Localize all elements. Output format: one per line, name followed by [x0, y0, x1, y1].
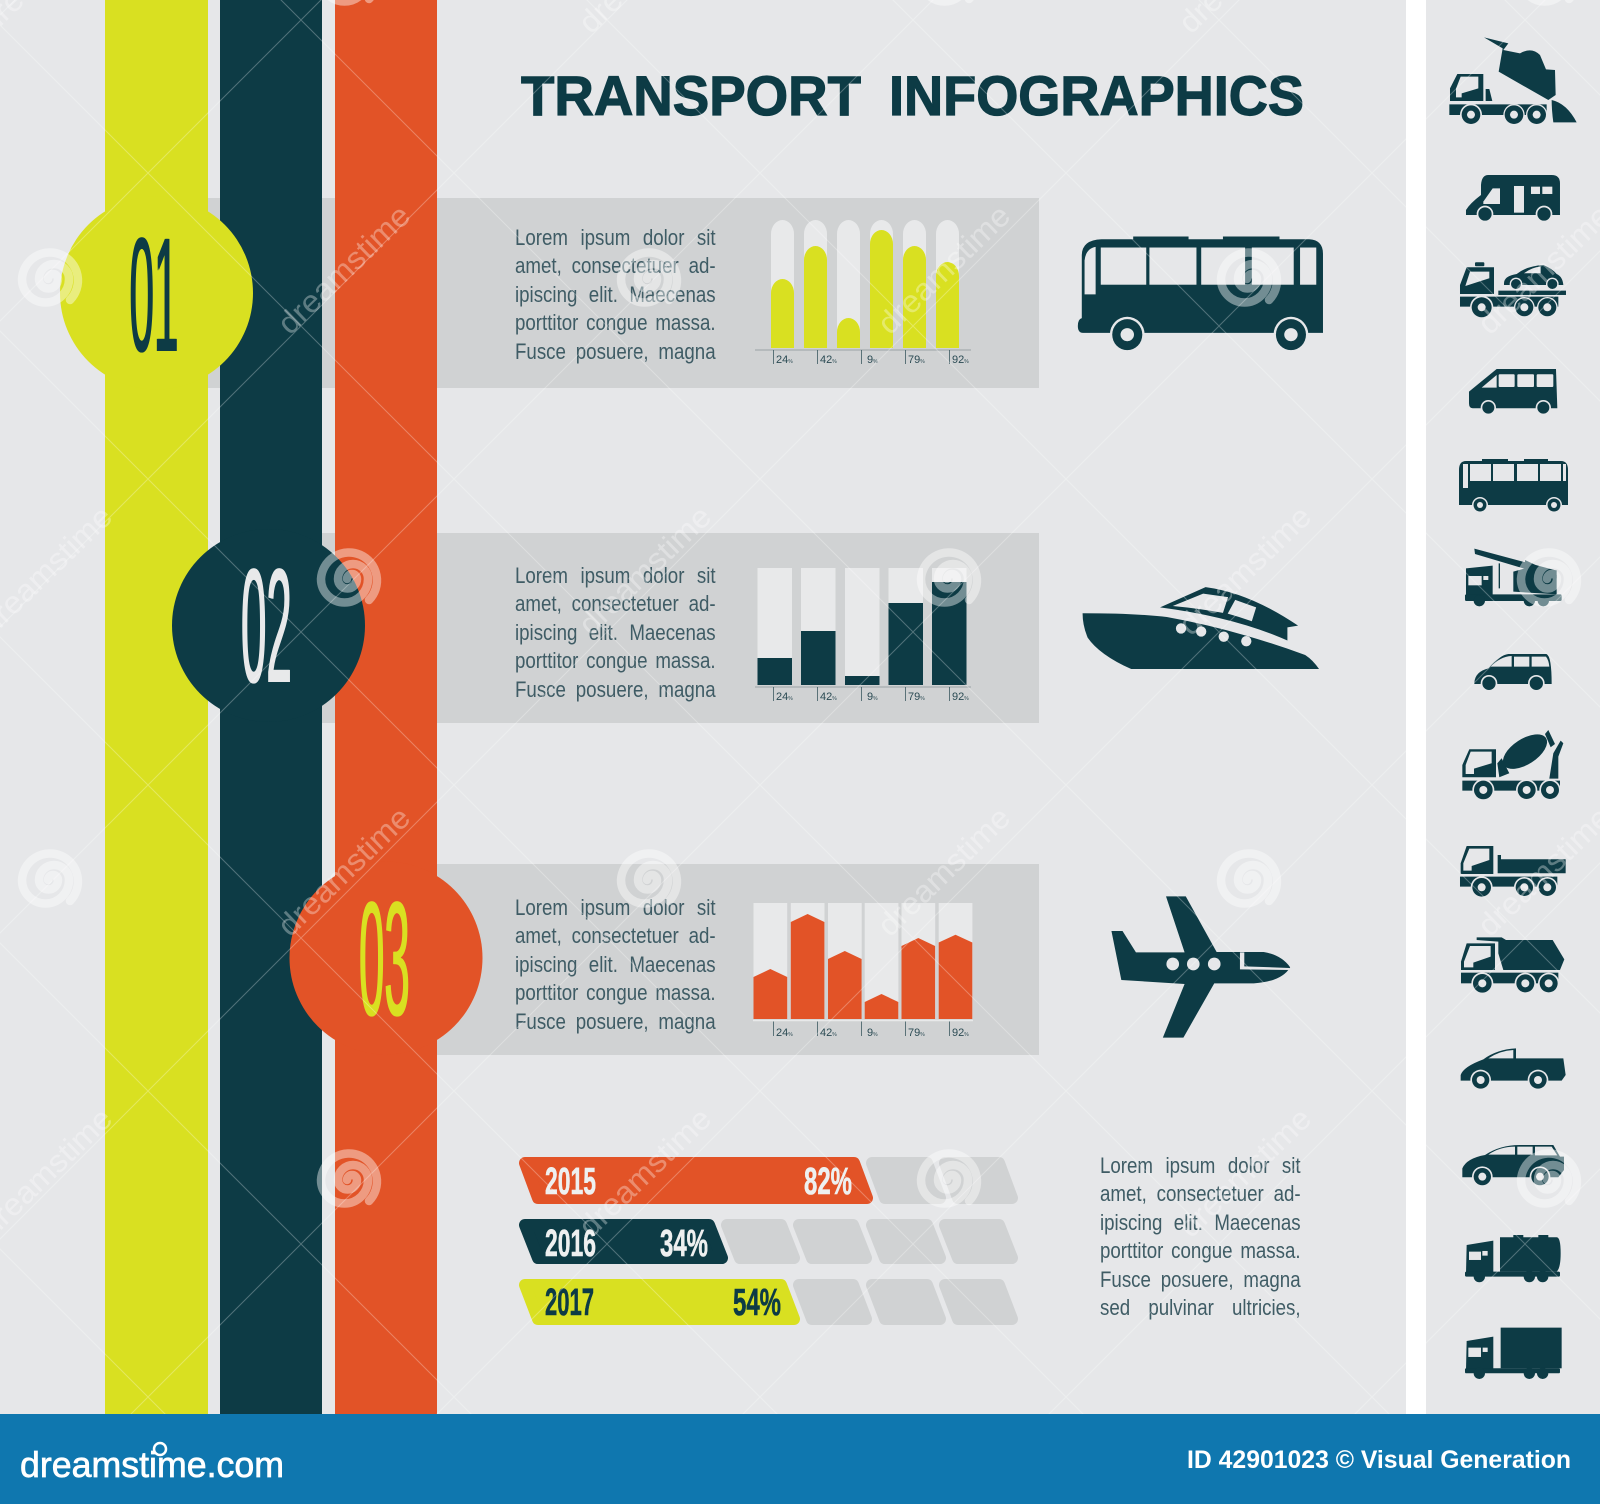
bar: 2015 82%: 82% — [804, 1161, 852, 1203]
text block: row 2: amet, consectetuer ad- — [515, 591, 716, 616]
chart: rounded yellow bars: 9% — [867, 354, 878, 366]
icon: station wagon — [1462, 1145, 1564, 1187]
chart: orange house-top bars: 9% — [867, 1027, 878, 1039]
icon: minivan — [1474, 654, 1552, 692]
watermark overlay: dreamstime — [572, 499, 718, 642]
bar: 2015 82%: 2015 — [545, 1161, 596, 1203]
icon: airplane — [1111, 896, 1290, 1038]
footer band: ID 42901023 © Visual Generation — [1187, 1446, 1571, 1474]
circle badge 03 — [290, 862, 482, 1054]
chart: navy column bars — [755, 568, 971, 703]
watermark overlay: dreamstime — [271, 800, 417, 943]
text block: row 3: amet, consectetuer ad- — [515, 923, 716, 948]
icon: cement mixer — [1462, 727, 1563, 801]
watermark overlay: dreamstime — [271, 198, 417, 341]
chart: orange house-top bars: 92% — [952, 1027, 969, 1039]
chart: orange house-top bars — [753, 903, 973, 1039]
text block: bottom right — [1100, 1153, 1301, 1320]
text block: row 3: Lorem ipsum dolor sit — [515, 895, 716, 920]
chart: navy column bars: 92% — [952, 691, 969, 703]
chart: rounded yellow bars — [755, 220, 971, 366]
text block: row 2: Fusce posuere, magna — [515, 677, 716, 702]
circle badge 02 — [172, 529, 365, 722]
watermark overlay: dreamstime — [572, 1101, 718, 1244]
text block: row 1: Lorem ipsum dolor sit — [515, 225, 716, 250]
icon: large bus — [1078, 236, 1323, 353]
bar: 2016 34%: 34% — [660, 1223, 708, 1265]
icon: pickup — [1461, 1048, 1566, 1090]
chart: rounded yellow bars: 79% — [908, 354, 925, 366]
panel: row 1 background — [208, 198, 1039, 388]
icon: dumper truck — [1461, 937, 1564, 994]
text block: row 3 — [515, 895, 716, 1034]
chart: orange house-top bars: 24% — [776, 1027, 793, 1039]
text block: bottom right: Fusce posuere, magna — [1100, 1267, 1301, 1292]
title — [521, 64, 1304, 127]
panel: row 2 background — [322, 533, 1039, 723]
icon: camper van — [1466, 175, 1560, 222]
bar: 2017 54%: 2017 — [545, 1282, 594, 1324]
bar: 2016 34%: 2016 — [545, 1223, 596, 1265]
bar: 2016 34% — [525, 1223, 1012, 1265]
text block: row 1: Fusce posuere, magna — [515, 339, 716, 364]
footer band — [0, 1414, 1600, 1504]
icon: flatbed truck — [1460, 846, 1566, 898]
text block: bottom right: amet, consectetuer ad- — [1100, 1181, 1301, 1206]
text block: bottom right: Lorem ipsum dolor sit — [1100, 1153, 1301, 1178]
title: INFOGRAPHICS — [889, 64, 1304, 127]
text block: row 2: Lorem ipsum dolor sit — [515, 563, 716, 588]
text block: row 2: ipiscing elit. Maecenas — [515, 620, 716, 645]
watermark overlay: dreamstime — [1172, 499, 1318, 642]
chart: navy column bars: 24% — [776, 691, 793, 703]
icon: tanker truck — [1465, 1235, 1561, 1282]
chart: navy column bars: 42% — [820, 691, 837, 703]
text block: row 1: ipiscing elit. Maecenas — [515, 282, 716, 307]
chart: orange house-top bars: 79% — [908, 1027, 925, 1039]
circle badge 03: 03 — [358, 869, 409, 1050]
icon: dump truck — [1449, 37, 1577, 126]
progress bars — [525, 1161, 1012, 1324]
chart: rounded yellow bars: 24% — [776, 354, 793, 366]
circle badge 02: 02 — [240, 536, 291, 717]
footer band: dreamstime.com — [20, 1444, 284, 1485]
stripe: orange — [335, 0, 437, 1414]
icon: crane truck — [1465, 549, 1562, 606]
chart: navy column bars: 79% — [908, 691, 925, 703]
circle badge 01 — [60, 196, 253, 390]
chart: navy column bars: 9% — [867, 691, 878, 703]
watermark overlay: dreamstime — [1172, 1101, 1318, 1244]
text block: row 3: porttitor congue massa. — [515, 980, 716, 1005]
watermark overlay: dreamstime — [871, 198, 1017, 341]
text block: row 1 — [515, 225, 716, 364]
text block: row 2 — [515, 563, 716, 702]
chart: rounded yellow bars: 92% — [952, 354, 969, 366]
text block: row 3: ipiscing elit. Maecenas — [515, 952, 716, 977]
circle badge 01: 01 — [129, 205, 178, 386]
watermark overlay: dreamstime — [871, 800, 1017, 943]
icon: box truck — [1465, 1328, 1562, 1379]
stripe: yellow — [105, 0, 208, 1414]
icon: tow truck with car — [1460, 262, 1566, 319]
sidebar white divider — [1406, 0, 1426, 1414]
icon: motor yacht — [1083, 587, 1319, 669]
chart: orange house-top bars: 42% — [820, 1027, 837, 1039]
text block: row 1: amet, consectetuer ad- — [515, 253, 716, 278]
bar: 2017 54% — [525, 1282, 1012, 1324]
text block: bottom right: ipiscing elit. Maecenas — [1100, 1210, 1301, 1235]
stripe: navy — [220, 0, 322, 1414]
text block: row 3: Fusce posuere, magna — [515, 1009, 716, 1034]
title: TRANSPORT — [521, 64, 861, 127]
bar: 2015 82% — [525, 1161, 1012, 1203]
bar: 2017 54%: 54% — [733, 1282, 781, 1324]
icon: small bus — [1459, 459, 1568, 513]
text block: bottom right: sed pulvinar ultricies, — [1100, 1295, 1301, 1320]
panel: row 3 background — [437, 864, 1039, 1055]
text block: bottom right: porttitor congue massa. — [1100, 1238, 1301, 1263]
text block: row 1: porttitor congue massa. — [515, 310, 716, 335]
text block: row 2: porttitor congue massa. — [515, 648, 716, 673]
icon: minibus — [1469, 369, 1557, 415]
chart: rounded yellow bars: 42% — [820, 354, 837, 366]
